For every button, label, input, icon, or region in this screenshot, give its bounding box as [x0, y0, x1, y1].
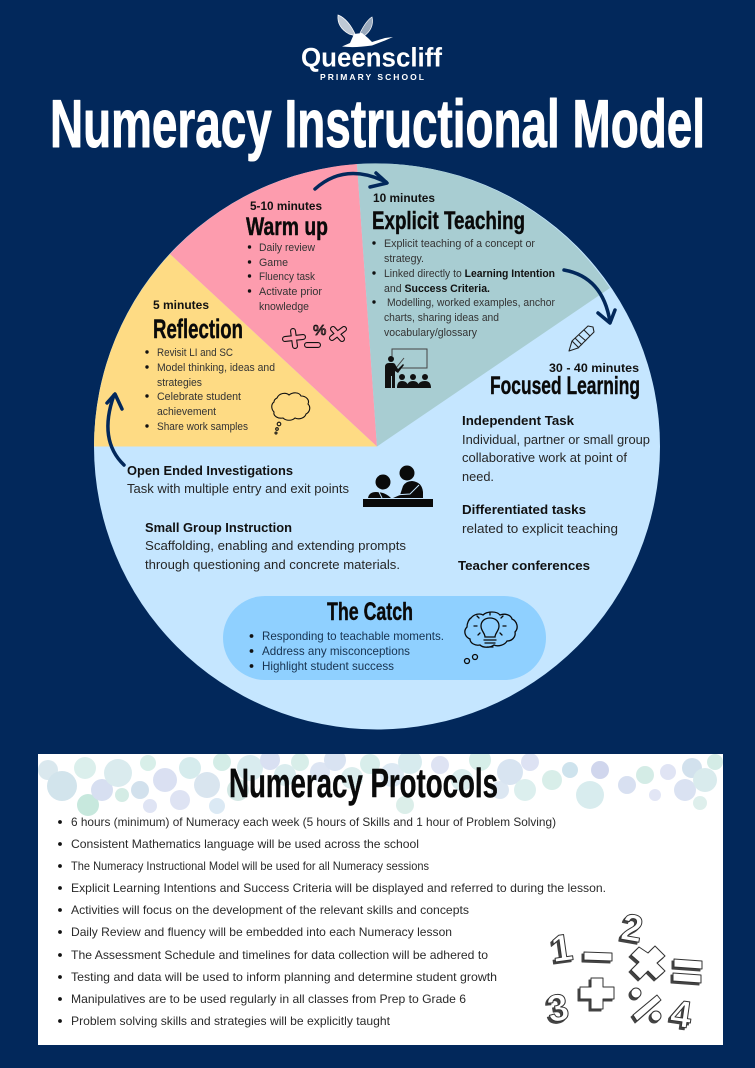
- icon: 3D numbers and maths symbols: [544, 906, 702, 1037]
- the catch bullets: Highlight student success: [262, 659, 394, 673]
- panel: warm up: [246, 199, 344, 346]
- text block: small group instruction: Small Group Instruction: [145, 520, 292, 535]
- protocols list: Manipulatives are to be used regularly in all classes from Prep to Grade 6: [71, 992, 466, 1006]
- slice: focused learning: [94, 164, 660, 730]
- pie chart: lesson structure: [94, 163, 660, 730]
- warm up bullets: Fluency task: [259, 271, 315, 283]
- explicit teaching bullets: charts, sharing ideas and: [384, 312, 499, 324]
- icon: 3D numbers and maths symbols: 1: [549, 927, 575, 971]
- warm up bullets: Activate prior: [259, 286, 322, 298]
- icon: 3D numbers and maths symbols: 4: [668, 993, 694, 1037]
- reflection bullets: Celebrate student: [157, 391, 241, 403]
- protocols list: Activities will focus on the development of the relevant skills and concepts: [71, 903, 469, 917]
- protocols list: Problem solving skills and strategies will be explicitly taught: [71, 1014, 391, 1028]
- arrow: warm up to explicit teaching: [315, 173, 387, 189]
- reflection bullets: [145, 347, 275, 433]
- protocols list: Explicit Learning Intentions and Success Criteria will be displayed and referred to during the lesson.: [71, 881, 606, 895]
- text block: independent task: Independent Task: [462, 413, 575, 428]
- protocols list: Consistent Mathematics language will be used across the school: [71, 837, 419, 851]
- text block: independent task: need.: [462, 469, 494, 484]
- panel: explicit teaching: [372, 191, 555, 388]
- explicit teaching bullets: strategy.: [384, 253, 424, 265]
- panel: focused learning heading: Focused Learning: [490, 372, 640, 400]
- explicit teaching bullets: vocabulary/glossary: [384, 327, 477, 339]
- text block: open ended investigations: [127, 463, 349, 496]
- text block: independent task: collaborative work at point of: [462, 450, 627, 465]
- protocols list: The Assessment Schedule and timelines for data collection will be adhered to: [71, 948, 488, 962]
- explicit teaching bullets: [372, 238, 555, 339]
- panel: warm up: Warm up: [246, 213, 328, 241]
- heading: Numeracy Protocols: [229, 760, 498, 806]
- panel: the catch: [223, 596, 546, 680]
- panel: focused learning heading: 30 - 40 minutes: [549, 361, 639, 375]
- text block: differentiated tasks: [462, 502, 618, 536]
- slice: explicit teaching: [357, 163, 610, 446]
- arrow: explicit teaching to focused learning: [564, 270, 615, 323]
- panel: explicit teaching: Explicit Teaching: [372, 207, 525, 235]
- reflection bullets: Share work samples: [157, 421, 248, 433]
- icon: pencil: [569, 326, 594, 351]
- bubbles banner: [38, 749, 723, 816]
- protocols list: The Numeracy Instructional Model will be used for all Numeracy sessions: [71, 859, 429, 873]
- icon: swan: [338, 15, 393, 47]
- protocols list: 6 hours (minimum) of Numeracy each week (5 hours of Skills and 1 hour of Problem Solving): [71, 815, 556, 829]
- panel: reflection: Reflection: [153, 314, 243, 344]
- reflection bullets: achievement: [157, 406, 216, 418]
- icon: 3D numbers and maths symbols: 2: [618, 906, 646, 951]
- icon: teacher and student at desk: [363, 466, 433, 507]
- warm up bullets: Game: [259, 257, 288, 269]
- text block: differentiated tasks: related to explicit teaching: [462, 521, 618, 536]
- arrow: focused learning to reflection: [107, 394, 124, 465]
- reflection bullets: strategies: [157, 377, 202, 389]
- text block: open ended investigations: Open Ended Investigations: [127, 463, 293, 478]
- protocols list: Testing and data will be used to inform planning and determine student growth: [71, 970, 497, 984]
- explicit teaching bullets: Explicit teaching of a concept or: [384, 238, 535, 250]
- text block: small group instruction: [145, 520, 406, 572]
- panel: reflection: [145, 298, 310, 434]
- the catch bullets: [250, 629, 444, 673]
- text block: open ended investigations: Task with multiple entry and exit points: [127, 481, 349, 496]
- explicit teaching bullets: and Success Criteria.: [384, 283, 490, 295]
- slice: warm up: [170, 164, 377, 446]
- text block: teacher conferences: Teacher conferences: [458, 558, 590, 573]
- reflection bullets: Revisit LI and SC: [157, 347, 233, 359]
- panel: focused learning heading: [490, 361, 640, 400]
- panel: warm up: 5-10 minutes: [250, 199, 322, 213]
- slice: reflection: [94, 254, 377, 446]
- warm up bullets: Daily review: [259, 242, 315, 254]
- panel: the catch: The Catch: [327, 598, 413, 626]
- logo: Queenscliff Primary School: PRIMARY SCHOOL: [320, 72, 424, 82]
- icon: thought cloud: [272, 393, 310, 434]
- icon: maths symbols: %: [313, 322, 326, 339]
- text block: independent task: [462, 413, 650, 484]
- reflection bullets: Model thinking, ideas and: [157, 362, 275, 374]
- protocols list: [58, 815, 606, 1028]
- icon: maths symbols: [285, 322, 344, 346]
- logo: Queenscliff Primary School: [301, 15, 442, 82]
- text block: independent task: Individual, partner or small group: [462, 432, 650, 447]
- the catch bullets: Address any misconceptions: [262, 644, 410, 658]
- the catch bullets: Responding to teachable moments.: [262, 629, 444, 643]
- explicit teaching bullets: Linked directly to Learning Intention: [384, 268, 555, 280]
- icon: 3D numbers and maths symbols: 3: [544, 986, 572, 1031]
- explicit teaching bullets: Modelling, worked examples, anchor: [387, 297, 555, 309]
- icon: teacher at board: [385, 349, 431, 388]
- protocols list: Daily Review and fluency will be embedded into each Numeracy lesson: [71, 925, 452, 939]
- text block: small group instruction: Scaffolding, enabling and extending prompts: [145, 538, 406, 553]
- text block: small group instruction: through questioning and concrete materials.: [145, 557, 400, 572]
- panel: explicit teaching: 10 minutes: [373, 191, 435, 205]
- warm up bullets: knowledge: [259, 301, 309, 313]
- text block: differentiated tasks: Differentiated tasks: [462, 502, 586, 517]
- panel: numeracy protocols: [38, 749, 723, 1045]
- logo: Queenscliff Primary School: Queenscliff: [301, 42, 442, 72]
- warm up bullets: [248, 242, 322, 313]
- panel: reflection: 5 minutes: [153, 298, 209, 312]
- icon: lightbulb thought cloud: [464, 612, 517, 664]
